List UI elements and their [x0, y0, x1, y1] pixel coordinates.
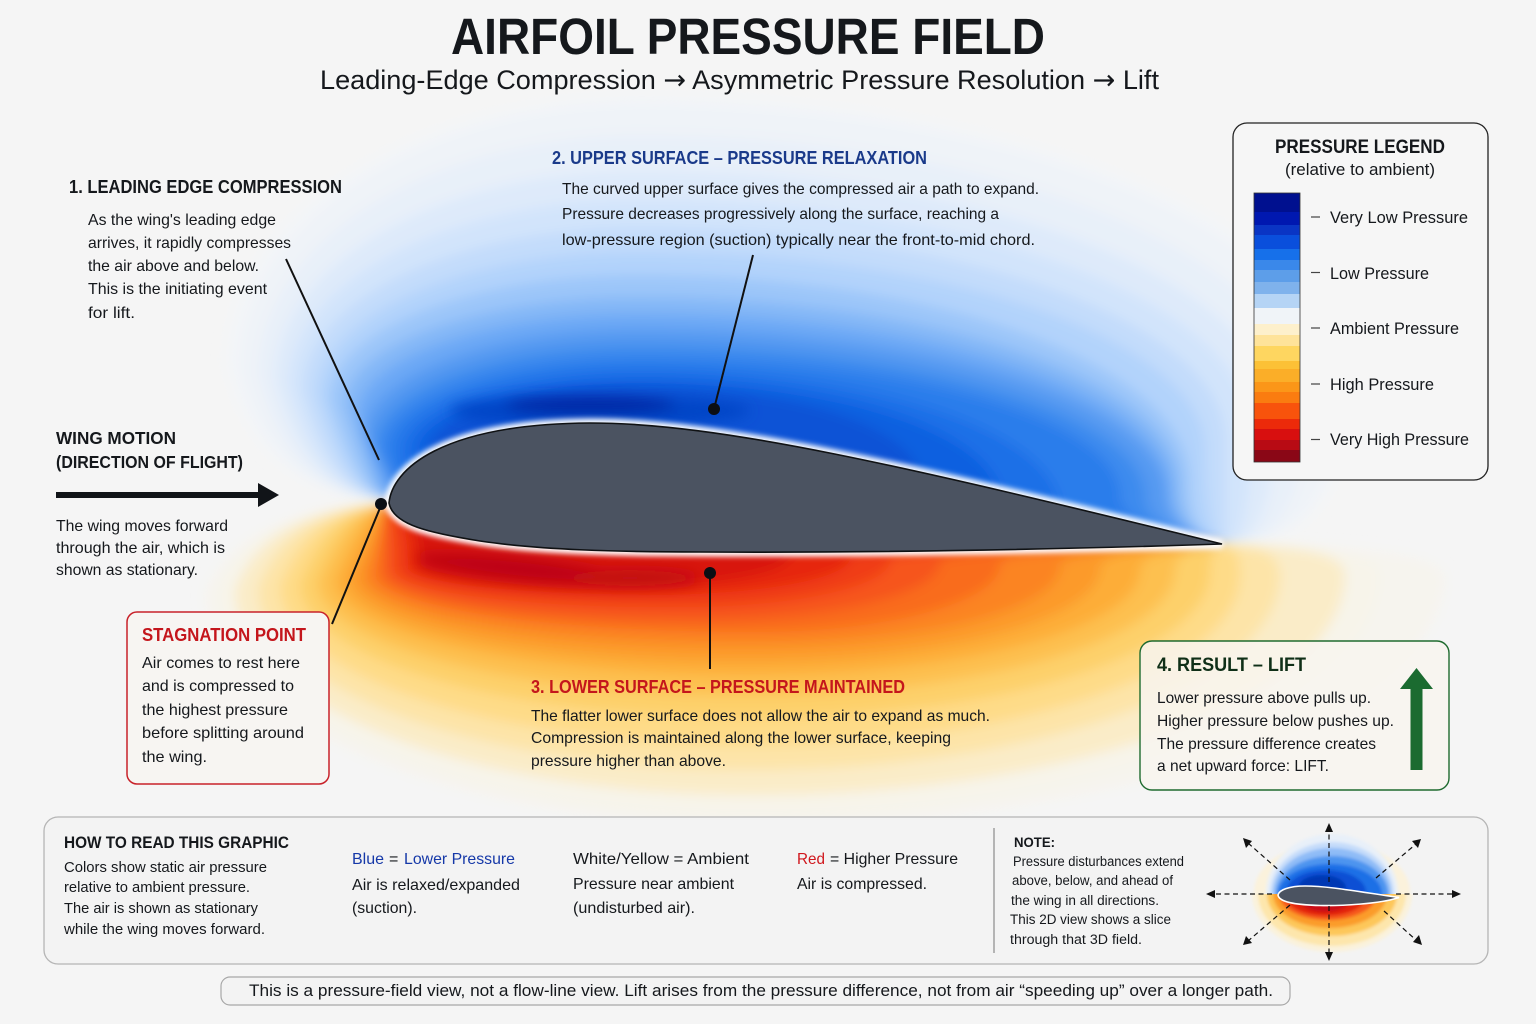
key: white and yellow: (undisturbed air). [573, 900, 695, 917]
callout 1: leading edge compression: for lift. [88, 305, 135, 322]
key: red [797, 851, 958, 893]
callout 3: lower surface: Compression is maintained along the lower surface, keeping [531, 730, 951, 747]
callout 3: lower surface: 3. LOWER SURFACE – PRESSURE MAINTAINED [531, 677, 905, 697]
callout 2: upper surface: The curved upper surface gives the compressed air a path to expand. [562, 181, 1039, 198]
key: white and yellow [573, 851, 750, 917]
callout 1: leading edge compression: the air above and below. [88, 258, 259, 275]
leader line: leading edge [286, 259, 379, 460]
callout 1: leading edge compression: arrives, it rapidly compresses [88, 235, 291, 252]
panel: pressure legend: Very High Pressure [1330, 431, 1469, 449]
panel: pressure legend: PRESSURE LEGEND [1275, 137, 1445, 158]
note text: NOTE: [1014, 834, 1055, 850]
how to read text [63, 834, 289, 938]
panel: result lift: 4. RESULT – LIFT [1157, 655, 1306, 676]
panel: result lift: Higher pressure below pushes up. [1157, 713, 1394, 730]
note text: Pressure disturbances extend [1013, 854, 1184, 869]
panel: stagnation point: Air comes to rest here [142, 655, 300, 672]
callout 3: lower surface: pressure higher than above. [531, 753, 726, 770]
key: white and yellow: White/Yellow = Ambient [573, 851, 750, 868]
key: blue: (suction). [352, 900, 417, 917]
note text: This 2D view shows a slice [1010, 912, 1171, 927]
key: blue: Lower Pressure [404, 851, 515, 868]
legend colour bar [1254, 193, 1300, 462]
panel: pressure legend [1233, 123, 1488, 480]
key: blue: Blue [352, 851, 384, 868]
panel: pressure legend: Very Low Pressure [1330, 209, 1468, 227]
arrow: direction of flight [56, 483, 279, 507]
key: blue: = [389, 851, 398, 868]
wing motion block: through the air, which is [56, 540, 225, 557]
panel: stagnation point: and is compressed to [142, 678, 294, 695]
callout 3: lower surface [531, 677, 990, 770]
footer statement [221, 977, 1290, 1005]
deep compression core [414, 547, 700, 591]
callout 1: leading edge compression: As the wing's leading edge [88, 212, 276, 229]
panel: result lift: The pressure difference creates [1157, 736, 1376, 753]
leader: stagnation point [332, 498, 387, 624]
panel: pressure legend: Low Pressure [1330, 265, 1429, 283]
wing motion block: WING MOTION [56, 428, 176, 448]
key: blue [352, 851, 520, 917]
callout 1: leading edge compression: This is the initiating event [88, 281, 268, 298]
callout 2: upper surface: low-pressure region (suction) typically near the front-to-mid chord. [562, 232, 1035, 249]
key: red: Red [797, 851, 825, 868]
how to read text: relative to ambient pressure. [64, 879, 250, 896]
wing motion block: shown as stationary. [56, 562, 198, 579]
callout 2: upper surface: Pressure decreases progressively along the surface, reaching a [562, 206, 999, 223]
how to read text: HOW TO READ THIS GRAPHIC [64, 834, 289, 852]
how to read text: while the wing moves forward. [63, 921, 265, 938]
leader: upper surface [708, 255, 753, 415]
panel: result lift [1140, 641, 1449, 790]
note text: through that 3D field. [1010, 932, 1142, 947]
mini pressure diagram [1206, 823, 1461, 961]
mini arrows: disturbances in all directions [1213, 830, 1454, 954]
panel: result lift: a net upward force: LIFT. [1157, 758, 1329, 775]
panel: stagnation point: STAGNATION POINT [142, 625, 306, 645]
note text: the wing in all directions. [1011, 893, 1159, 908]
panel: stagnation point: the highest pressure [142, 702, 288, 719]
wing motion block: The wing moves forward [56, 518, 228, 535]
wing motion block [56, 428, 279, 579]
icon: lift arrow [1400, 668, 1433, 770]
callout 1: leading edge compression [69, 177, 342, 322]
key: red: Air is compressed. [797, 876, 927, 893]
callout 2: upper surface: 2. UPPER SURFACE – PRESSURE RELAXATION [552, 148, 927, 168]
title: AIRFOIL PRESSURE FIELD [451, 8, 1045, 65]
deep suction core [450, 396, 750, 426]
wing motion block: (DIRECTION OF FLIGHT) [56, 452, 243, 472]
leader: lower surface [704, 567, 716, 669]
how to read text: The air is shown as stationary [64, 900, 258, 917]
callout 3: lower surface: The flatter lower surface does not allow the air to expand as much. [531, 708, 990, 725]
panel: stagnation point: before splitting around [142, 725, 304, 742]
key: white and yellow: Pressure near ambient [573, 876, 735, 893]
mini airfoil [1278, 886, 1399, 906]
subtitle: Leading-Edge Compression → Asymmetric Pressure Resolution → Lift [320, 65, 1159, 96]
pressure field: high pressure below the wing [205, 505, 1445, 825]
note text [1010, 834, 1184, 947]
how to read text: Colors show static air pressure [64, 859, 267, 876]
callout 1: leading edge compression: 1. LEADING EDGE COMPRESSION [69, 177, 342, 197]
panel: pressure legend: (relative to ambient) [1285, 161, 1435, 179]
pressure field: low pressure above the wing [225, 95, 1350, 545]
panel: stagnation point [127, 612, 329, 784]
panel: pressure legend: High Pressure [1330, 376, 1434, 394]
main airfoil [389, 423, 1222, 552]
footer statement: This is a pressure-field view, not a flow-line view. Lift arises from the pressure difference, not from air “speeding up” over a longer path. [249, 981, 1273, 1000]
key: red: = Higher Pressure [830, 851, 958, 868]
panel: pressure legend: Ambient Pressure [1330, 320, 1459, 338]
callout 2: upper surface [552, 148, 1039, 249]
panel: result lift: Lower pressure above pulls up. [1157, 690, 1371, 707]
note text: above, below, and ahead of [1012, 873, 1173, 888]
panel: stagnation point: the wing. [142, 749, 207, 766]
panel: how to read this graphic [44, 817, 1488, 964]
key: blue: Air is relaxed/expanded [352, 877, 520, 894]
